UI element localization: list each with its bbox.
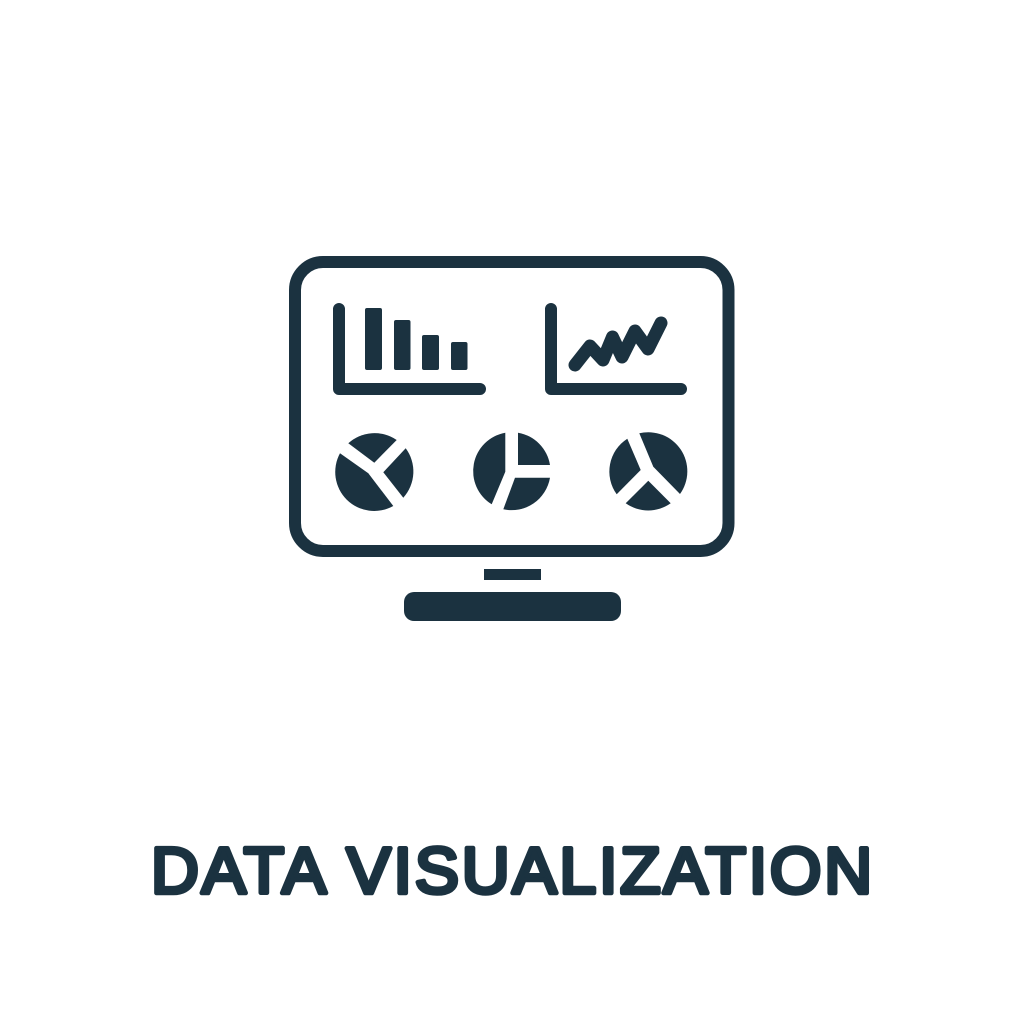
monitor screen frame — [295, 262, 728, 551]
title: DATA VISUALIZATION — [151, 835, 872, 907]
pie chart 2 — [473, 433, 550, 510]
monitor stand neck — [484, 569, 541, 580]
bar 2 — [394, 320, 410, 370]
monitor stand base — [404, 592, 621, 621]
line chart trend — [575, 323, 661, 365]
bar 3 — [422, 335, 439, 370]
bar chart axes — [339, 309, 480, 389]
icon: monitor with dashboard — [295, 262, 728, 621]
bar 4 — [451, 342, 468, 370]
pie chart 3 — [609, 432, 687, 510]
bar chart — [339, 308, 480, 389]
line chart — [551, 309, 681, 389]
line chart axes — [551, 309, 681, 389]
pie chart 1 — [335, 433, 413, 511]
bar 1 — [365, 308, 382, 370]
